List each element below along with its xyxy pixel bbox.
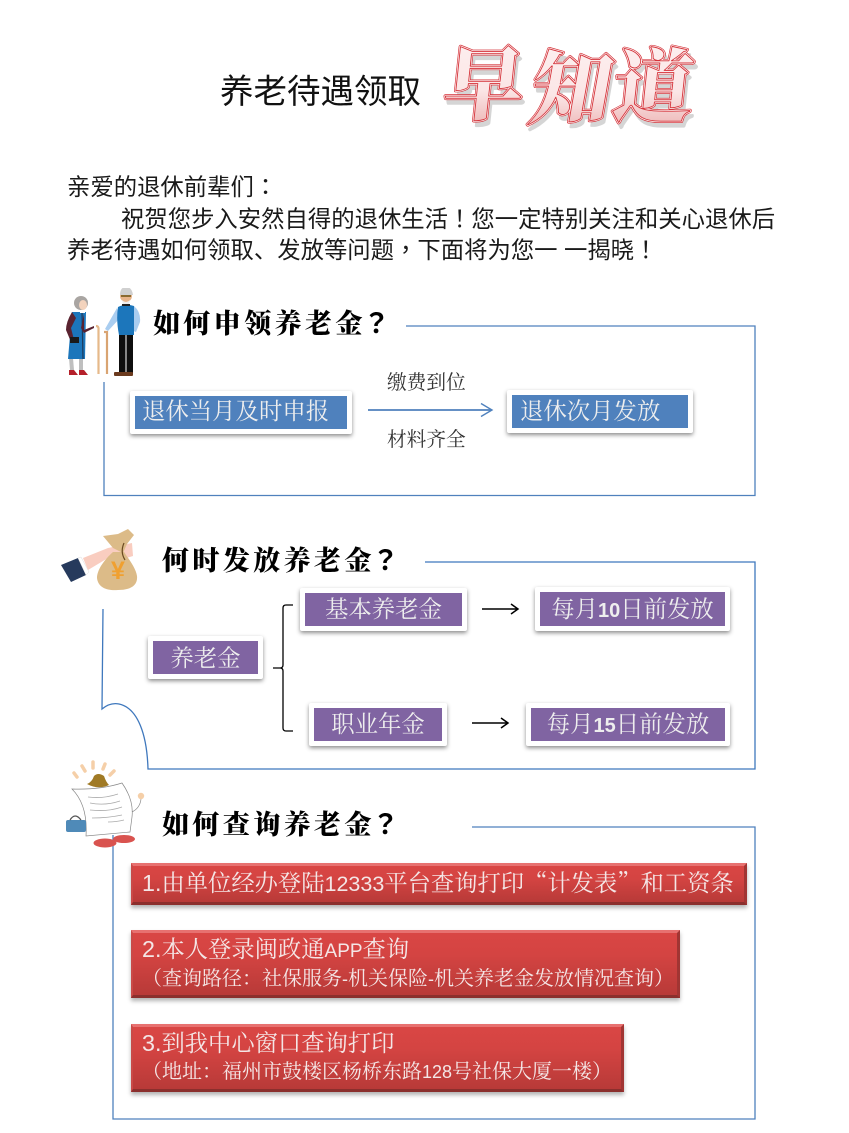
icon: elderly couple (66, 288, 140, 376)
box: 退休次月发放: 退休次月发放 (520, 392, 660, 426)
bracket (273, 604, 293, 732)
icon: money bag (61, 529, 138, 590)
box: 养老金 (148, 636, 263, 679)
red box 3: （地址：福州市鼓楼区杨桥东路128号社保大厦一楼） (142, 1055, 612, 1084)
title: decorative 早知道: 道 (609, 25, 701, 138)
label: 缴费到位: 缴费到位 (387, 366, 466, 395)
title: decorative 早知道: 早 (441, 26, 533, 140)
intro text: 养老待遇如何领取、发放等问题，下面将为您一 一揭晓！ (67, 231, 657, 265)
title: decorative 早知道: 道 (611, 28, 703, 140)
title: decorative 早知道: 知 (523, 26, 623, 140)
title: decorative 早知道: 道 (609, 25, 701, 138)
box: 每月15日前发放: 每月15日前发放 (547, 705, 709, 739)
heading 2: 何时发放养老金？ (162, 539, 402, 578)
arrow (368, 402, 494, 418)
box: 退休当月及时申报: 退休当月及时申报 (142, 392, 329, 426)
box: 每月15日前发放 (526, 703, 730, 746)
label: 材料齐全: 材料齐全 (387, 423, 466, 452)
box: 退休次月发放 (507, 390, 693, 433)
intro text: 亲爱的退休前辈们： (67, 168, 277, 202)
icon: money bag: ¥ (111, 557, 125, 585)
title: decorative 早知道: 道 (609, 25, 701, 138)
red box 2: （查询路径：社保服务-机关保险-机关养老金发放情况查询） (142, 962, 674, 991)
woman dress (68, 312, 86, 359)
icon: document character (66, 760, 144, 848)
woman sleeves (66, 312, 94, 342)
man head (120, 290, 132, 302)
arrow (482, 603, 520, 615)
woman legs (69, 358, 83, 370)
man sleeves (105, 306, 140, 332)
woman head (74, 296, 88, 310)
box: 职业年金: 职业年金 (331, 705, 425, 739)
man cane (104, 332, 107, 374)
title: decorative 早知道: 知 (523, 26, 623, 140)
heading 3: 如何查询养老金？ (162, 803, 402, 842)
man legs (119, 335, 126, 373)
intro text: 祝贺您步入安然自得的退休生活！您一定特别关注和关心退休后 (121, 200, 775, 234)
box: 每月10日前发放 (535, 587, 730, 631)
box: 每月10日前发放: 每月10日前发放 (551, 590, 714, 624)
title: plain part: 养老待遇领取 (220, 74, 421, 111)
box: 基本养老金: 基本养老金 (325, 590, 442, 624)
red box 3: 3.到我中心窗口查询打印 (142, 1024, 394, 1058)
title: decorative 早知道 (439, 25, 703, 140)
red box 1: 1.由单位经办登陆12333平台查询打印“计发表”和工资条 (142, 864, 734, 898)
woman cane (96, 326, 99, 374)
red box 2: 2.本人登录闽政通APP查询 (142, 930, 409, 964)
man vest (117, 305, 134, 335)
box: 退休当月及时申报 (130, 391, 352, 434)
title: decorative 早知道: 知 (523, 26, 623, 140)
arrow (472, 717, 510, 729)
red box 3 (131, 1024, 624, 1092)
box: 养老金: 养老金 (170, 639, 241, 673)
heading 1: 如何申领养老金？ (153, 302, 393, 341)
box: 职业年金 (309, 703, 447, 746)
intro text (67, 168, 775, 265)
red box 2 (131, 930, 680, 998)
box: 基本养老金 (300, 588, 467, 631)
